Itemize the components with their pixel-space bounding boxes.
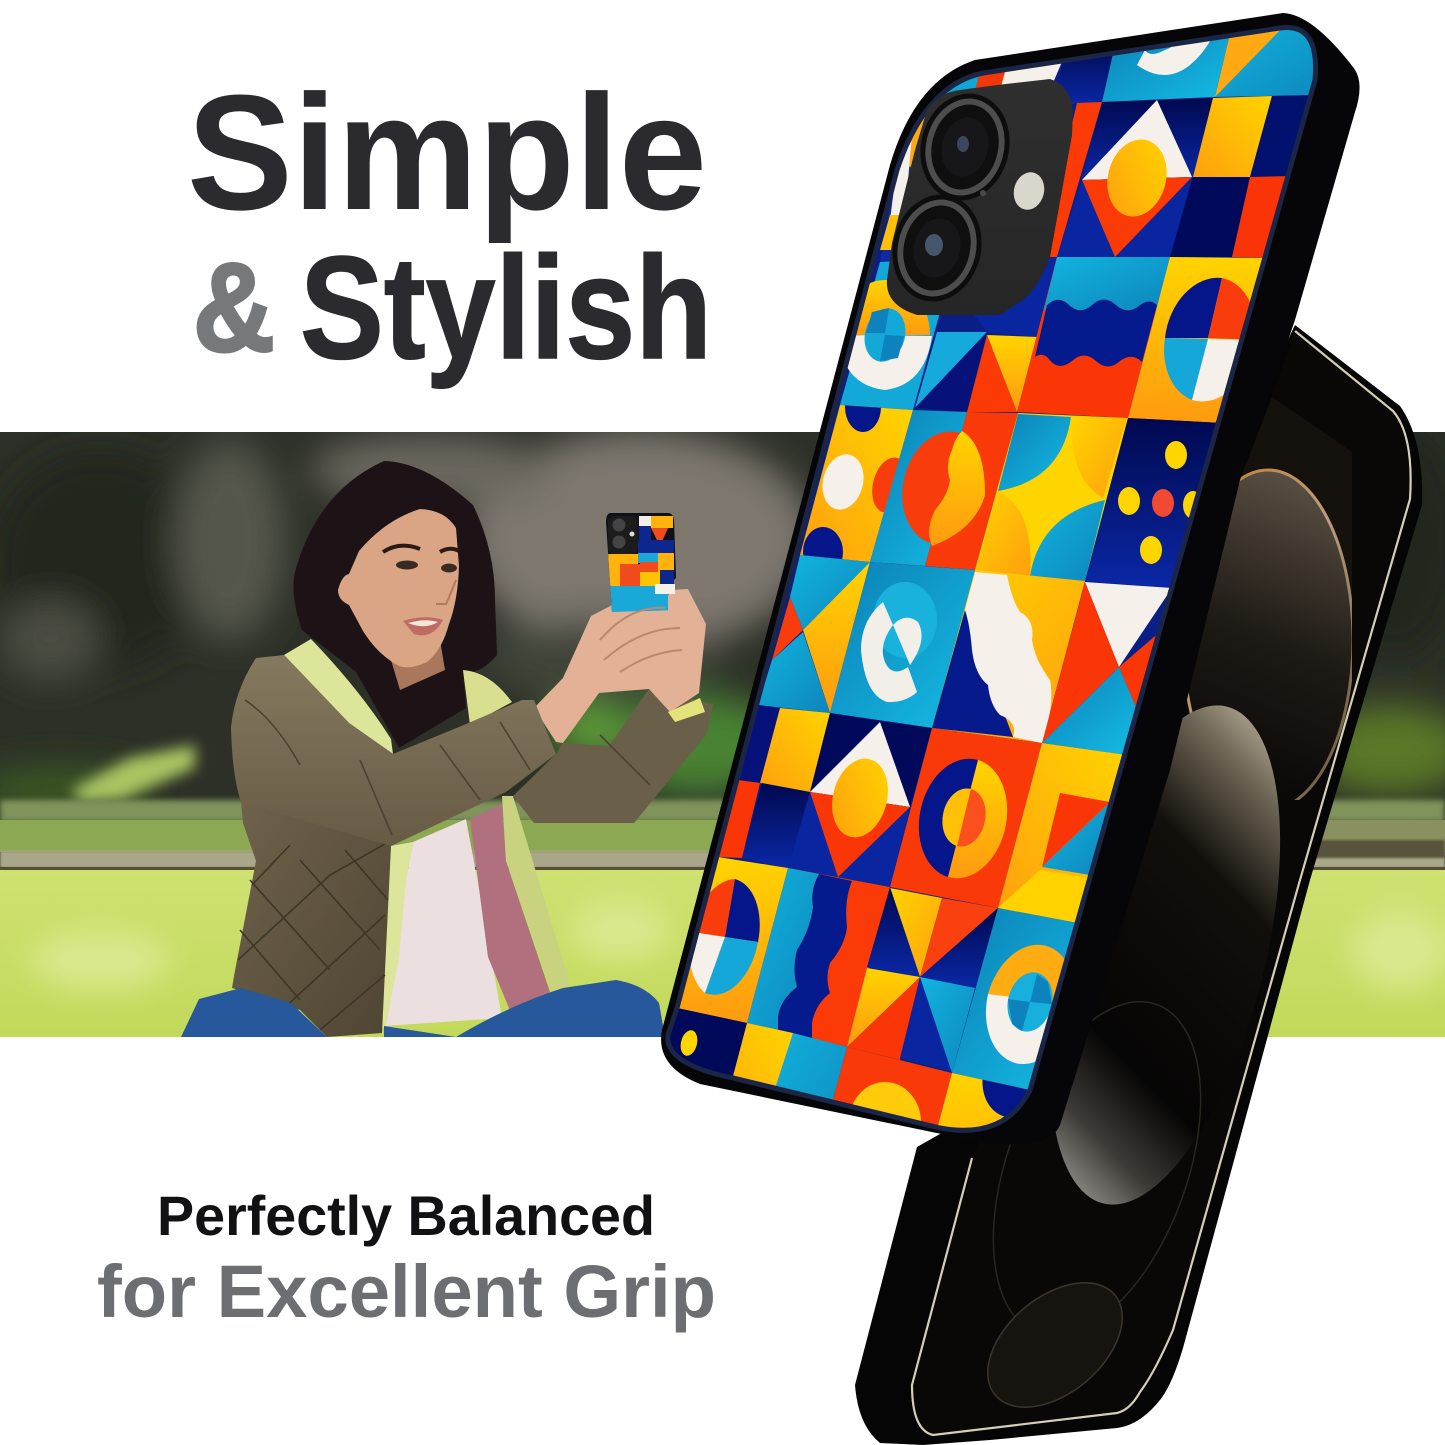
sleeve folds (245, 700, 650, 835)
microphone dot (980, 190, 986, 196)
row 7 tiles (670, 1008, 1028, 1128)
eyes, brows and mouth (383, 546, 459, 635)
ampersand: & (193, 237, 275, 378)
row 4 tiles (758, 555, 1172, 755)
dark phone body (912, 331, 1411, 1435)
phone behind the case, showing its back (855, 325, 1422, 1445)
row 3 tiles (800, 405, 1216, 588)
camera island (887, 79, 1073, 315)
woman taking a selfie (181, 461, 713, 1037)
black outer shell (855, 325, 1422, 1445)
case rim (668, 27, 1316, 1130)
rear sleeve (513, 689, 713, 823)
row 6 tiles (677, 857, 1078, 1090)
quartered ellipse tile (1128, 257, 1267, 423)
yellow collar lining (284, 639, 393, 754)
jeans (181, 980, 665, 1037)
faint swirl ellipse (953, 974, 1241, 1364)
row 5 tiles (718, 705, 1127, 923)
upper lens with rainbow arc (1183, 470, 1353, 810)
small phone in hand (606, 513, 676, 616)
neck (385, 640, 445, 690)
hair (293, 461, 497, 748)
lower lens (881, 185, 993, 311)
center lining (380, 842, 413, 1030)
camera bump arc (1006, 682, 1324, 1228)
case back print: geometric pattern (670, 30, 1314, 1128)
row 2 tiles (838, 257, 1267, 423)
face (338, 509, 459, 667)
wave tile (1017, 257, 1170, 418)
watch strap (668, 698, 705, 722)
photo band: park background (0, 420, 1445, 1037)
lawn and path bands (0, 800, 1445, 1037)
right lining (502, 796, 570, 992)
plaid shirt (470, 804, 550, 1018)
jacket body (232, 800, 391, 1037)
quilting lines (238, 840, 392, 1030)
title: Simple: Simple (187, 61, 707, 244)
gold frame (912, 331, 1411, 1435)
row 0 tiles (946, 30, 1314, 104)
title: Stylish: Stylish (300, 226, 712, 389)
fingers (600, 608, 682, 672)
white shirt (384, 819, 502, 1026)
hands (534, 582, 706, 743)
lower swirl (964, 1258, 1146, 1432)
front sleeve (231, 655, 556, 846)
ring tile (840, 262, 940, 410)
flash (1010, 169, 1048, 213)
subtitle: for Excellent Grip: for Excellent Grip (97, 1250, 716, 1333)
black case side (661, 13, 1360, 1145)
sunlit green patch (72, 745, 195, 802)
subtitle: Perfectly Balanced: Perfectly Balanced (157, 1184, 655, 1247)
row 1 tiles (880, 95, 1320, 262)
phone case body (661, 13, 1360, 1145)
upper lens (909, 84, 1021, 210)
camera module (881, 79, 1073, 315)
screen-like dark panel (1232, 397, 1352, 640)
